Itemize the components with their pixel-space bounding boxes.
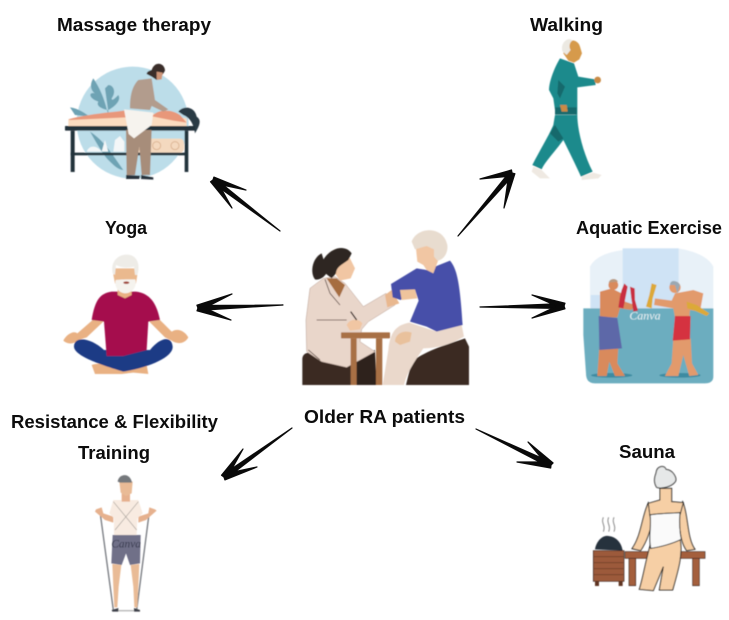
heading: Resistance and Flexibility Training: Resistance & Flexibility [11, 411, 219, 432]
watermark: Canva [629, 308, 661, 322]
icon: seated yoga man illustration [63, 255, 188, 374]
icon: massage therapy illustration [65, 64, 200, 180]
heading: Resistance and Flexibility Training: Training [78, 442, 150, 463]
heading: Walking: Walking [530, 14, 603, 35]
patient hand [400, 289, 417, 300]
patient sweater [391, 261, 463, 332]
table [341, 332, 390, 338]
heading: Yoga: Yoga [105, 217, 148, 238]
heading: Sauna: Sauna [619, 441, 676, 462]
icon: aquatic exercise illustration [583, 248, 713, 383]
arrow: to resistance and flexibility training [222, 428, 292, 480]
patient head [416, 242, 438, 273]
stool left [302, 352, 355, 385]
doctor hand with pen [347, 320, 362, 331]
doctor legs [352, 350, 377, 385]
icon: walking man illustration [532, 39, 602, 180]
icon: doctor and older patient illustration (center) [302, 230, 469, 385]
arm right [678, 502, 695, 551]
heading: Older RA patients: Older RA patients [304, 406, 465, 427]
doctor lab coat [306, 277, 395, 367]
arrow: to sauna [476, 429, 553, 468]
left man [600, 288, 635, 317]
patient trousers [383, 323, 464, 385]
right man [654, 290, 703, 317]
arrow: to yoga [197, 294, 283, 320]
icon: resistance band training illustration [95, 475, 157, 612]
towel [650, 513, 681, 548]
arrow: to massage therapy [210, 177, 280, 231]
red dumbbells [618, 283, 638, 312]
heading: Aquatic Exercise: Aquatic Exercise [576, 217, 722, 238]
shoulders and neck [648, 488, 683, 517]
yellow dumbbell [646, 283, 657, 308]
heading: Massage therapy: Massage therapy [57, 14, 212, 35]
legs [639, 538, 681, 591]
heading: Resistance and Flexibility Training [11, 411, 219, 463]
arm left [632, 503, 653, 551]
stool right [406, 338, 469, 385]
icon: sauna illustration [593, 466, 705, 591]
arrow: to aquatic exercise [480, 295, 565, 318]
doctor head [330, 255, 355, 281]
arrow: to walking [458, 170, 515, 236]
watermark: Canva [111, 538, 141, 550]
